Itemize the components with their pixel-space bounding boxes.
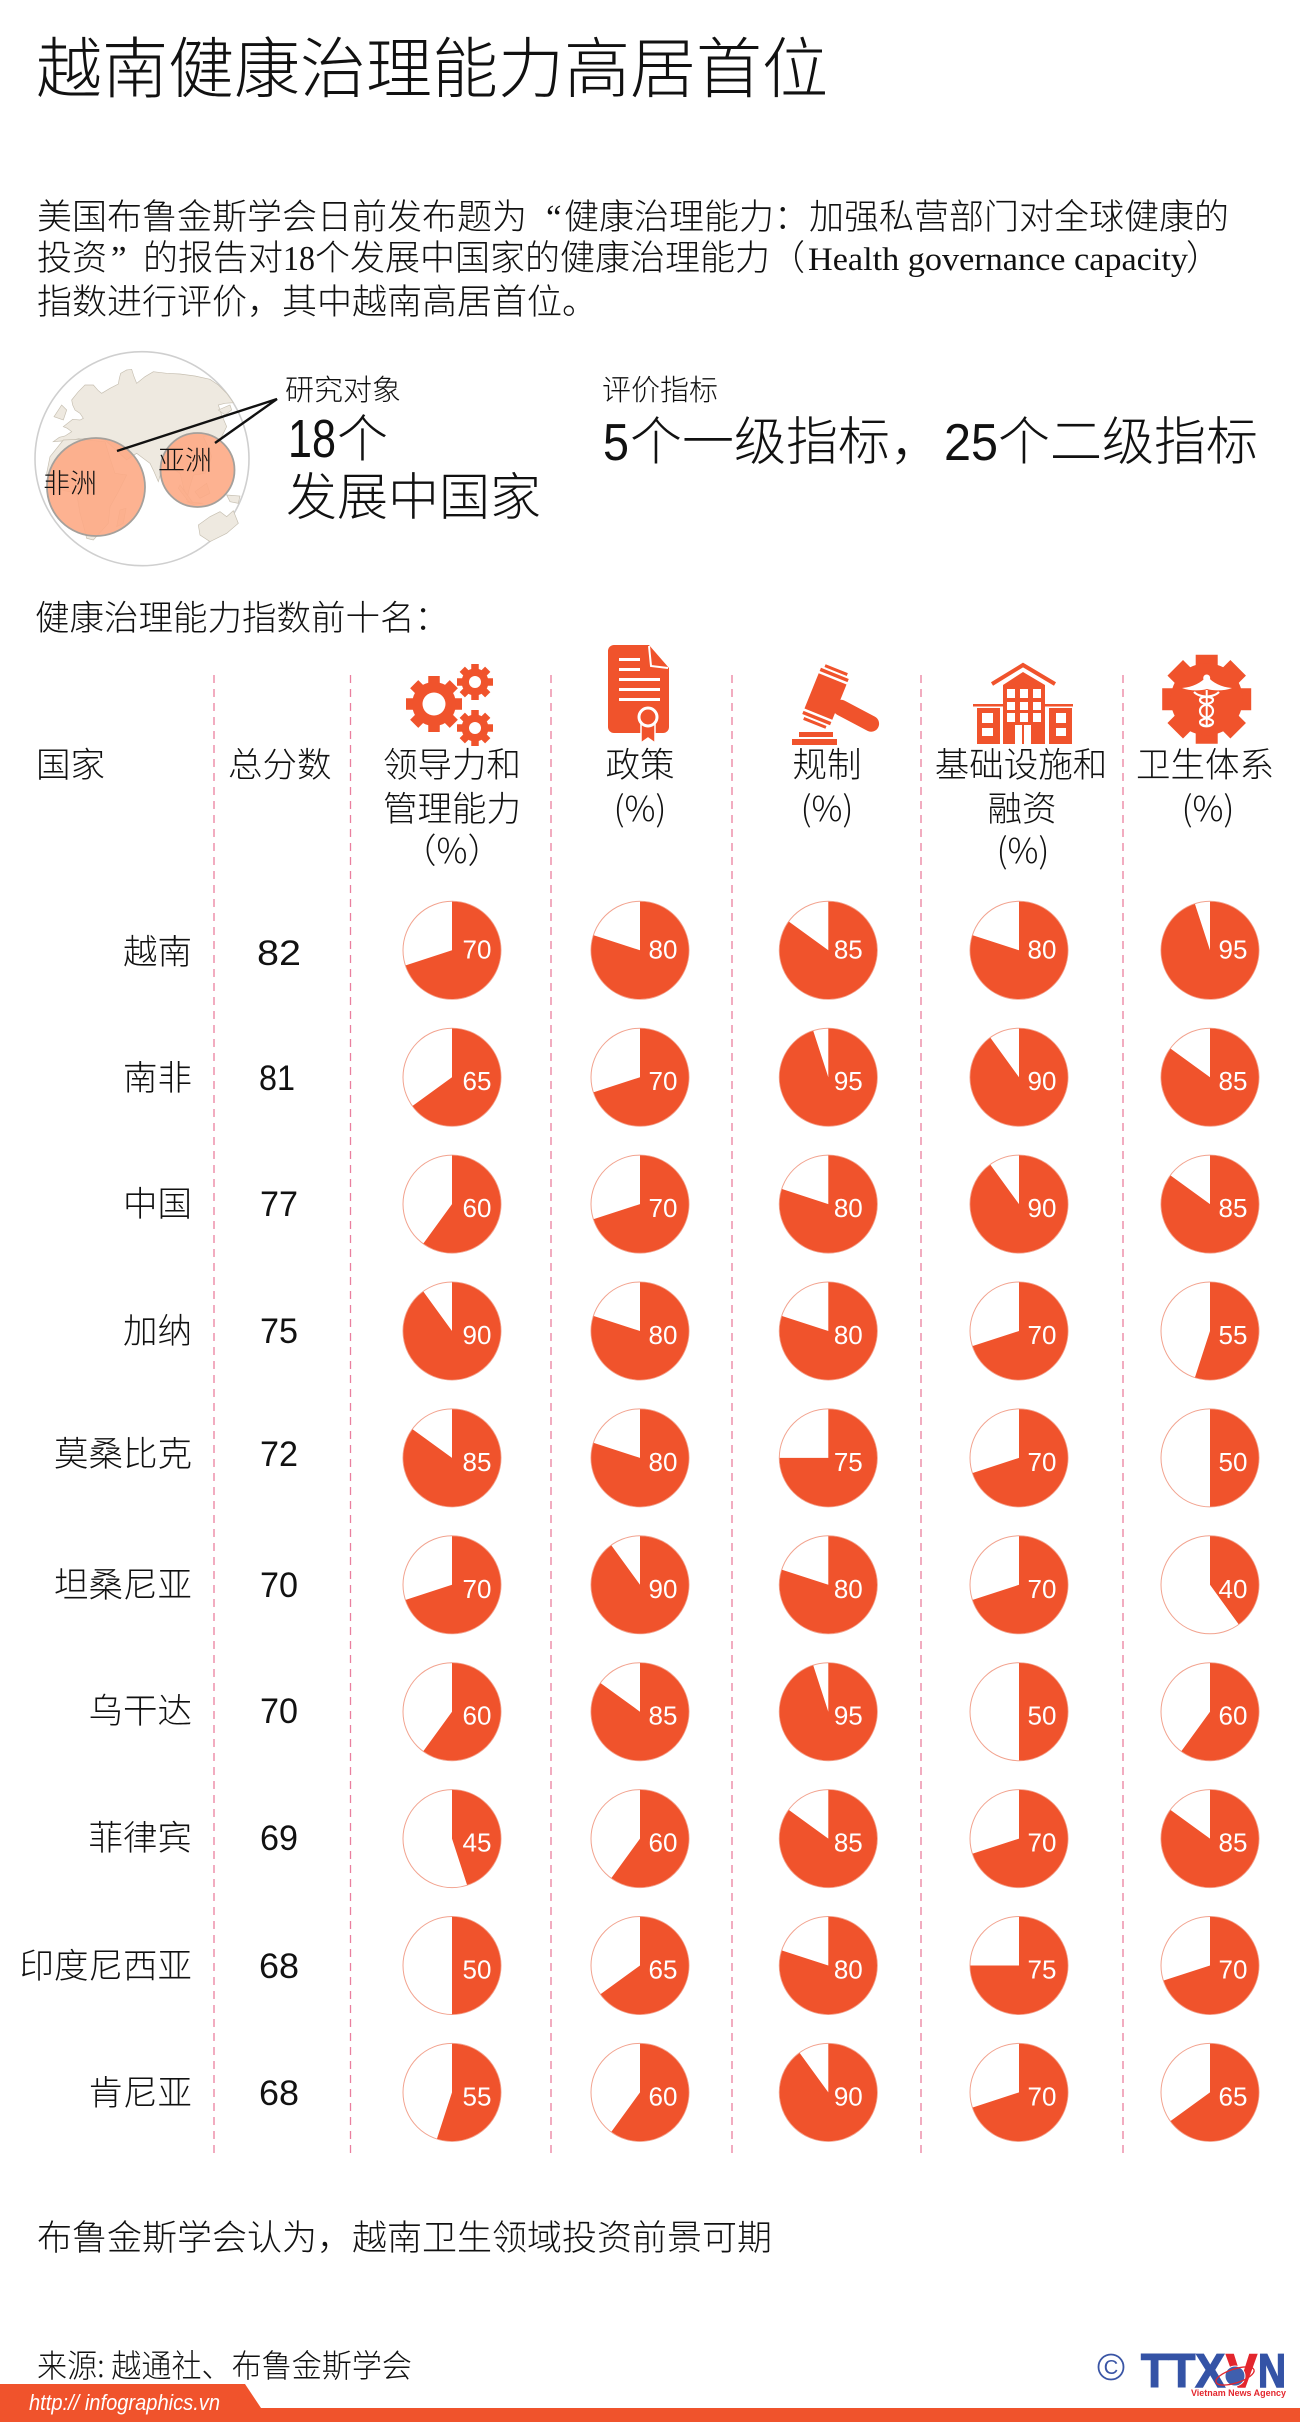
column header: infrastructure and financing	[935, 665, 1107, 873]
pie 60	[591, 1790, 689, 1888]
pie 40: 40	[1219, 1574, 1247, 1604]
pie 70: 70	[1219, 1954, 1247, 1984]
pie 85	[403, 1409, 501, 1507]
column header: leadership	[383, 664, 521, 873]
pie 70	[1161, 1916, 1259, 2014]
row: Mozambique: 莫桑比克	[54, 1426, 192, 1476]
pie 80	[970, 901, 1068, 999]
column header: leadership: （%）	[402, 823, 502, 873]
label: Asia: 亚洲	[158, 439, 212, 478]
pie 60: 60	[649, 1828, 677, 1858]
pie 80: 80	[649, 1320, 677, 1350]
pie 85: 85	[649, 1701, 677, 1731]
study subject block	[285, 367, 541, 530]
pie 90: 90	[834, 2081, 863, 2111]
intro paragraph: 的报告对	[143, 230, 283, 281]
column header: leadership: 领导力和	[383, 737, 521, 787]
pie 80	[591, 1409, 689, 1507]
column header: policy	[606, 645, 674, 831]
pie 80: 80	[649, 934, 677, 964]
pie 80: 80	[834, 1193, 863, 1223]
pie 85	[1161, 1028, 1259, 1126]
pie 85	[591, 1663, 689, 1761]
row: Tanzania: 坦桑尼亚	[54, 1557, 192, 1607]
pie 95: 95	[834, 1066, 863, 1096]
pie 90	[970, 1155, 1068, 1253]
pie 60: 60	[463, 1701, 491, 1731]
evaluation indicators block: 评价指标	[602, 367, 718, 409]
footer bar with url tab: http:// infographics.vn	[29, 2390, 220, 2415]
row: Tanzania	[54, 1536, 1259, 1634]
row: Uganda	[88, 1663, 1259, 1761]
logo: TTXVN Vietnam News Agency: Vietnam News Agency	[1191, 2388, 1287, 2399]
pie 50: 50	[1219, 1447, 1247, 1477]
pie 65	[1161, 2043, 1259, 2141]
pie 70: 70	[463, 1574, 491, 1604]
icon: gavel	[792, 663, 882, 745]
pie 65: 65	[463, 1066, 491, 1096]
column header: health system	[1136, 655, 1274, 831]
pie 70	[591, 1028, 689, 1126]
pie 85	[1161, 1155, 1259, 1253]
pie 85: 85	[1219, 1193, 1247, 1223]
pie 80	[591, 1282, 689, 1380]
column header: country: 国家	[36, 737, 105, 787]
pie 50	[1161, 1409, 1259, 1507]
pie 85: 85	[1219, 1066, 1247, 1096]
row: Mozambique: 72	[260, 1435, 298, 1474]
pie 85	[779, 1790, 877, 1888]
intro paragraph: Health governance capacity	[808, 242, 1189, 278]
pie 65: 65	[649, 1954, 677, 1984]
row: Uganda: 70	[260, 1692, 298, 1731]
pie 70	[970, 2043, 1068, 2141]
column header: policy: (%)	[614, 781, 666, 831]
study subject block: 研究对象	[285, 367, 401, 409]
conclusion text: 布鲁金斯学会认为，越南卫生领域投资前景可期	[37, 2210, 772, 2261]
intro paragraph: 投资	[37, 230, 107, 281]
row: China	[123, 1155, 1259, 1253]
pie 75	[970, 1916, 1068, 2014]
pie 55: 55	[463, 2081, 491, 2111]
pie 50: 50	[463, 1954, 491, 1984]
pie 75: 75	[834, 1447, 863, 1477]
icon: hospital building	[973, 665, 1073, 744]
footer bar with url tab	[0, 2384, 1300, 2422]
row: South Africa	[123, 1028, 1259, 1126]
pie 80: 80	[834, 1954, 863, 1984]
column header: policy: 政策	[606, 737, 674, 787]
column header: health system: 卫生体系	[1136, 737, 1274, 787]
pie 60: 60	[1219, 1701, 1247, 1731]
icon: medical gear	[1162, 655, 1251, 744]
logo: TTXVN Vietnam News Agency: N	[1258, 2345, 1286, 2398]
pie 70: 70	[1028, 1574, 1056, 1604]
intro paragraph: 个发展中国家的健康治理能力（	[315, 230, 805, 281]
pie 65	[591, 1916, 689, 2014]
evaluation indicators block: 5	[603, 414, 629, 472]
logo: TTXVN Vietnam News Agency: C	[1104, 2357, 1118, 2379]
pie 40	[1161, 1536, 1259, 1634]
pie 90	[970, 1028, 1068, 1126]
row: South Africa: 81	[259, 1059, 295, 1098]
pie 85	[1161, 1790, 1259, 1888]
icon: document with seal	[608, 645, 669, 743]
source line: 来源: 越通社、布鲁金斯学会	[37, 2341, 412, 2387]
pie 80: 80	[1028, 934, 1056, 964]
pie 90: 90	[649, 1574, 677, 1604]
pie 70	[403, 1536, 501, 1634]
pie 55	[403, 2043, 501, 2141]
row: Kenya: 肯尼亚	[88, 2065, 192, 2115]
column header: regulation: 规制	[792, 737, 862, 787]
icon: gears	[406, 664, 493, 746]
row: Kenya	[88, 2043, 1259, 2141]
pie 90	[403, 1282, 501, 1380]
row: Uganda: 乌干达	[88, 1683, 192, 1733]
row: Philippines: 69	[260, 1819, 298, 1858]
pie 45	[403, 1790, 501, 1888]
pie 70	[403, 901, 501, 999]
pie 55: 55	[1219, 1320, 1247, 1350]
pie 70: 70	[1028, 1447, 1056, 1477]
pie 70	[970, 1536, 1068, 1634]
pie 85: 85	[463, 1447, 491, 1477]
pie 70	[591, 1155, 689, 1253]
pie 80	[591, 901, 689, 999]
row: Vietnam: 82	[257, 934, 301, 973]
pie 75: 75	[1028, 1954, 1056, 1984]
intro paragraph: ）	[1186, 230, 1221, 281]
pie 70	[970, 1282, 1068, 1380]
callout lines from continents	[117, 399, 277, 451]
pie 60	[403, 1663, 501, 1761]
pie 85: 85	[834, 934, 863, 964]
label: Africa: 非洲	[43, 462, 97, 501]
pie 60	[1161, 1663, 1259, 1761]
intro paragraph: “	[546, 198, 562, 237]
row: Ghana	[123, 1282, 1259, 1380]
pie 95	[779, 1028, 877, 1126]
evaluation indicators block: 个一级指标，	[630, 400, 942, 475]
pie 85: 85	[1219, 1828, 1247, 1858]
logo: TTXVN Vietnam News Agency: V	[1226, 2345, 1257, 2398]
pie 90: 90	[463, 1320, 491, 1350]
pie 80: 80	[834, 1574, 863, 1604]
intro paragraph: 健康治理能力：加强私营部门对全球健康的	[564, 189, 1229, 240]
column header: health system: (%)	[1182, 781, 1234, 831]
pie 60: 60	[649, 2081, 677, 2111]
row: Indonesia	[20, 1916, 1259, 2014]
row: Ghana: 加纳	[123, 1303, 192, 1353]
row: Philippines	[88, 1790, 1259, 1888]
row: Vietnam	[123, 901, 1259, 999]
row: South Africa: 南非	[123, 1050, 192, 1100]
pie 50: 50	[1028, 1701, 1056, 1731]
column header: regulation: (%)	[801, 781, 853, 831]
pie 70: 70	[1028, 2081, 1056, 2111]
row: Kenya: 68	[259, 2074, 299, 2113]
column header: leadership: 管理能力	[383, 781, 521, 831]
row: Tanzania: 70	[260, 1566, 298, 1605]
row: Ghana: 75	[260, 1312, 298, 1351]
row: Indonesia: 68	[259, 1947, 299, 1986]
logo: TTXVN Vietnam News Agency: TTX	[1141, 2345, 1225, 2398]
study subject block: 发展中国家	[286, 456, 541, 530]
pie 70: 70	[649, 1066, 677, 1096]
evaluation indicators block	[602, 367, 1258, 475]
column header: total score: 总分数	[228, 737, 332, 787]
table heading: 健康治理能力指数前十名：	[35, 590, 449, 640]
pie 55	[1161, 1282, 1259, 1380]
row: Philippines: 菲律宾	[88, 1810, 192, 1860]
pie 80	[779, 1916, 877, 2014]
pie 95	[779, 1663, 877, 1761]
world globe with Africa and Asia highlighted	[35, 352, 249, 566]
row: Mozambique	[54, 1409, 1259, 1507]
pie 70: 70	[649, 1193, 677, 1223]
column header: infrastructure and financing: 基础设施和	[935, 737, 1107, 787]
pie 70: 70	[463, 934, 491, 964]
pie 90	[779, 2043, 877, 2141]
pie 50	[970, 1663, 1068, 1761]
pie 45: 45	[463, 1828, 491, 1858]
pie 95: 95	[1219, 934, 1247, 964]
pie 60	[403, 1155, 501, 1253]
pie 60	[591, 2043, 689, 2141]
pie 75	[779, 1409, 877, 1507]
intro paragraph: 美国布鲁金斯学会日前发布题为	[37, 189, 527, 240]
pie 85: 85	[834, 1828, 863, 1858]
pie 70: 70	[1028, 1828, 1056, 1858]
pie 60: 60	[463, 1193, 491, 1223]
pie 65	[403, 1028, 501, 1126]
pie 50	[403, 1916, 501, 2014]
intro paragraph: ”	[111, 239, 127, 278]
evaluation indicators block: 个二级指标	[998, 400, 1258, 475]
column header: regulation	[792, 663, 882, 831]
pie 65: 65	[1219, 2081, 1247, 2111]
intro paragraph: 18	[283, 239, 315, 278]
pie 70: 70	[1028, 1320, 1056, 1350]
row: Vietnam: 越南	[123, 924, 192, 974]
column header: infrastructure and financing: (%)	[997, 823, 1049, 873]
pie 90	[591, 1536, 689, 1634]
pie 80	[779, 1536, 877, 1634]
pie 90: 90	[1028, 1193, 1056, 1223]
intro paragraph: 指数进行评价，其中越南高居首位。	[37, 274, 597, 325]
pie 90: 90	[1028, 1066, 1056, 1096]
row: China: 77	[260, 1185, 298, 1224]
column header: infrastructure and financing: 融资	[988, 781, 1056, 831]
pie 80: 80	[649, 1447, 677, 1477]
pie 70	[970, 1790, 1068, 1888]
evaluation indicators block: 25	[944, 414, 998, 472]
pie 80	[779, 1155, 877, 1253]
row: Indonesia: 印度尼西亚	[20, 1938, 192, 1988]
pie 70	[970, 1409, 1068, 1507]
pie 95: 95	[834, 1701, 863, 1731]
pie 80	[779, 1282, 877, 1380]
pie 80: 80	[834, 1320, 863, 1350]
pie 85	[779, 901, 877, 999]
intro paragraph	[37, 189, 1229, 325]
study subject block: 个	[337, 398, 388, 472]
pie 95	[1161, 901, 1259, 999]
row: China: 中国	[123, 1176, 192, 1226]
study subject block: 18	[288, 409, 336, 469]
title: 越南健康治理能力高居首位	[36, 16, 828, 112]
logo: TTXVN Vietnam News Agency	[1098, 2345, 1287, 2399]
